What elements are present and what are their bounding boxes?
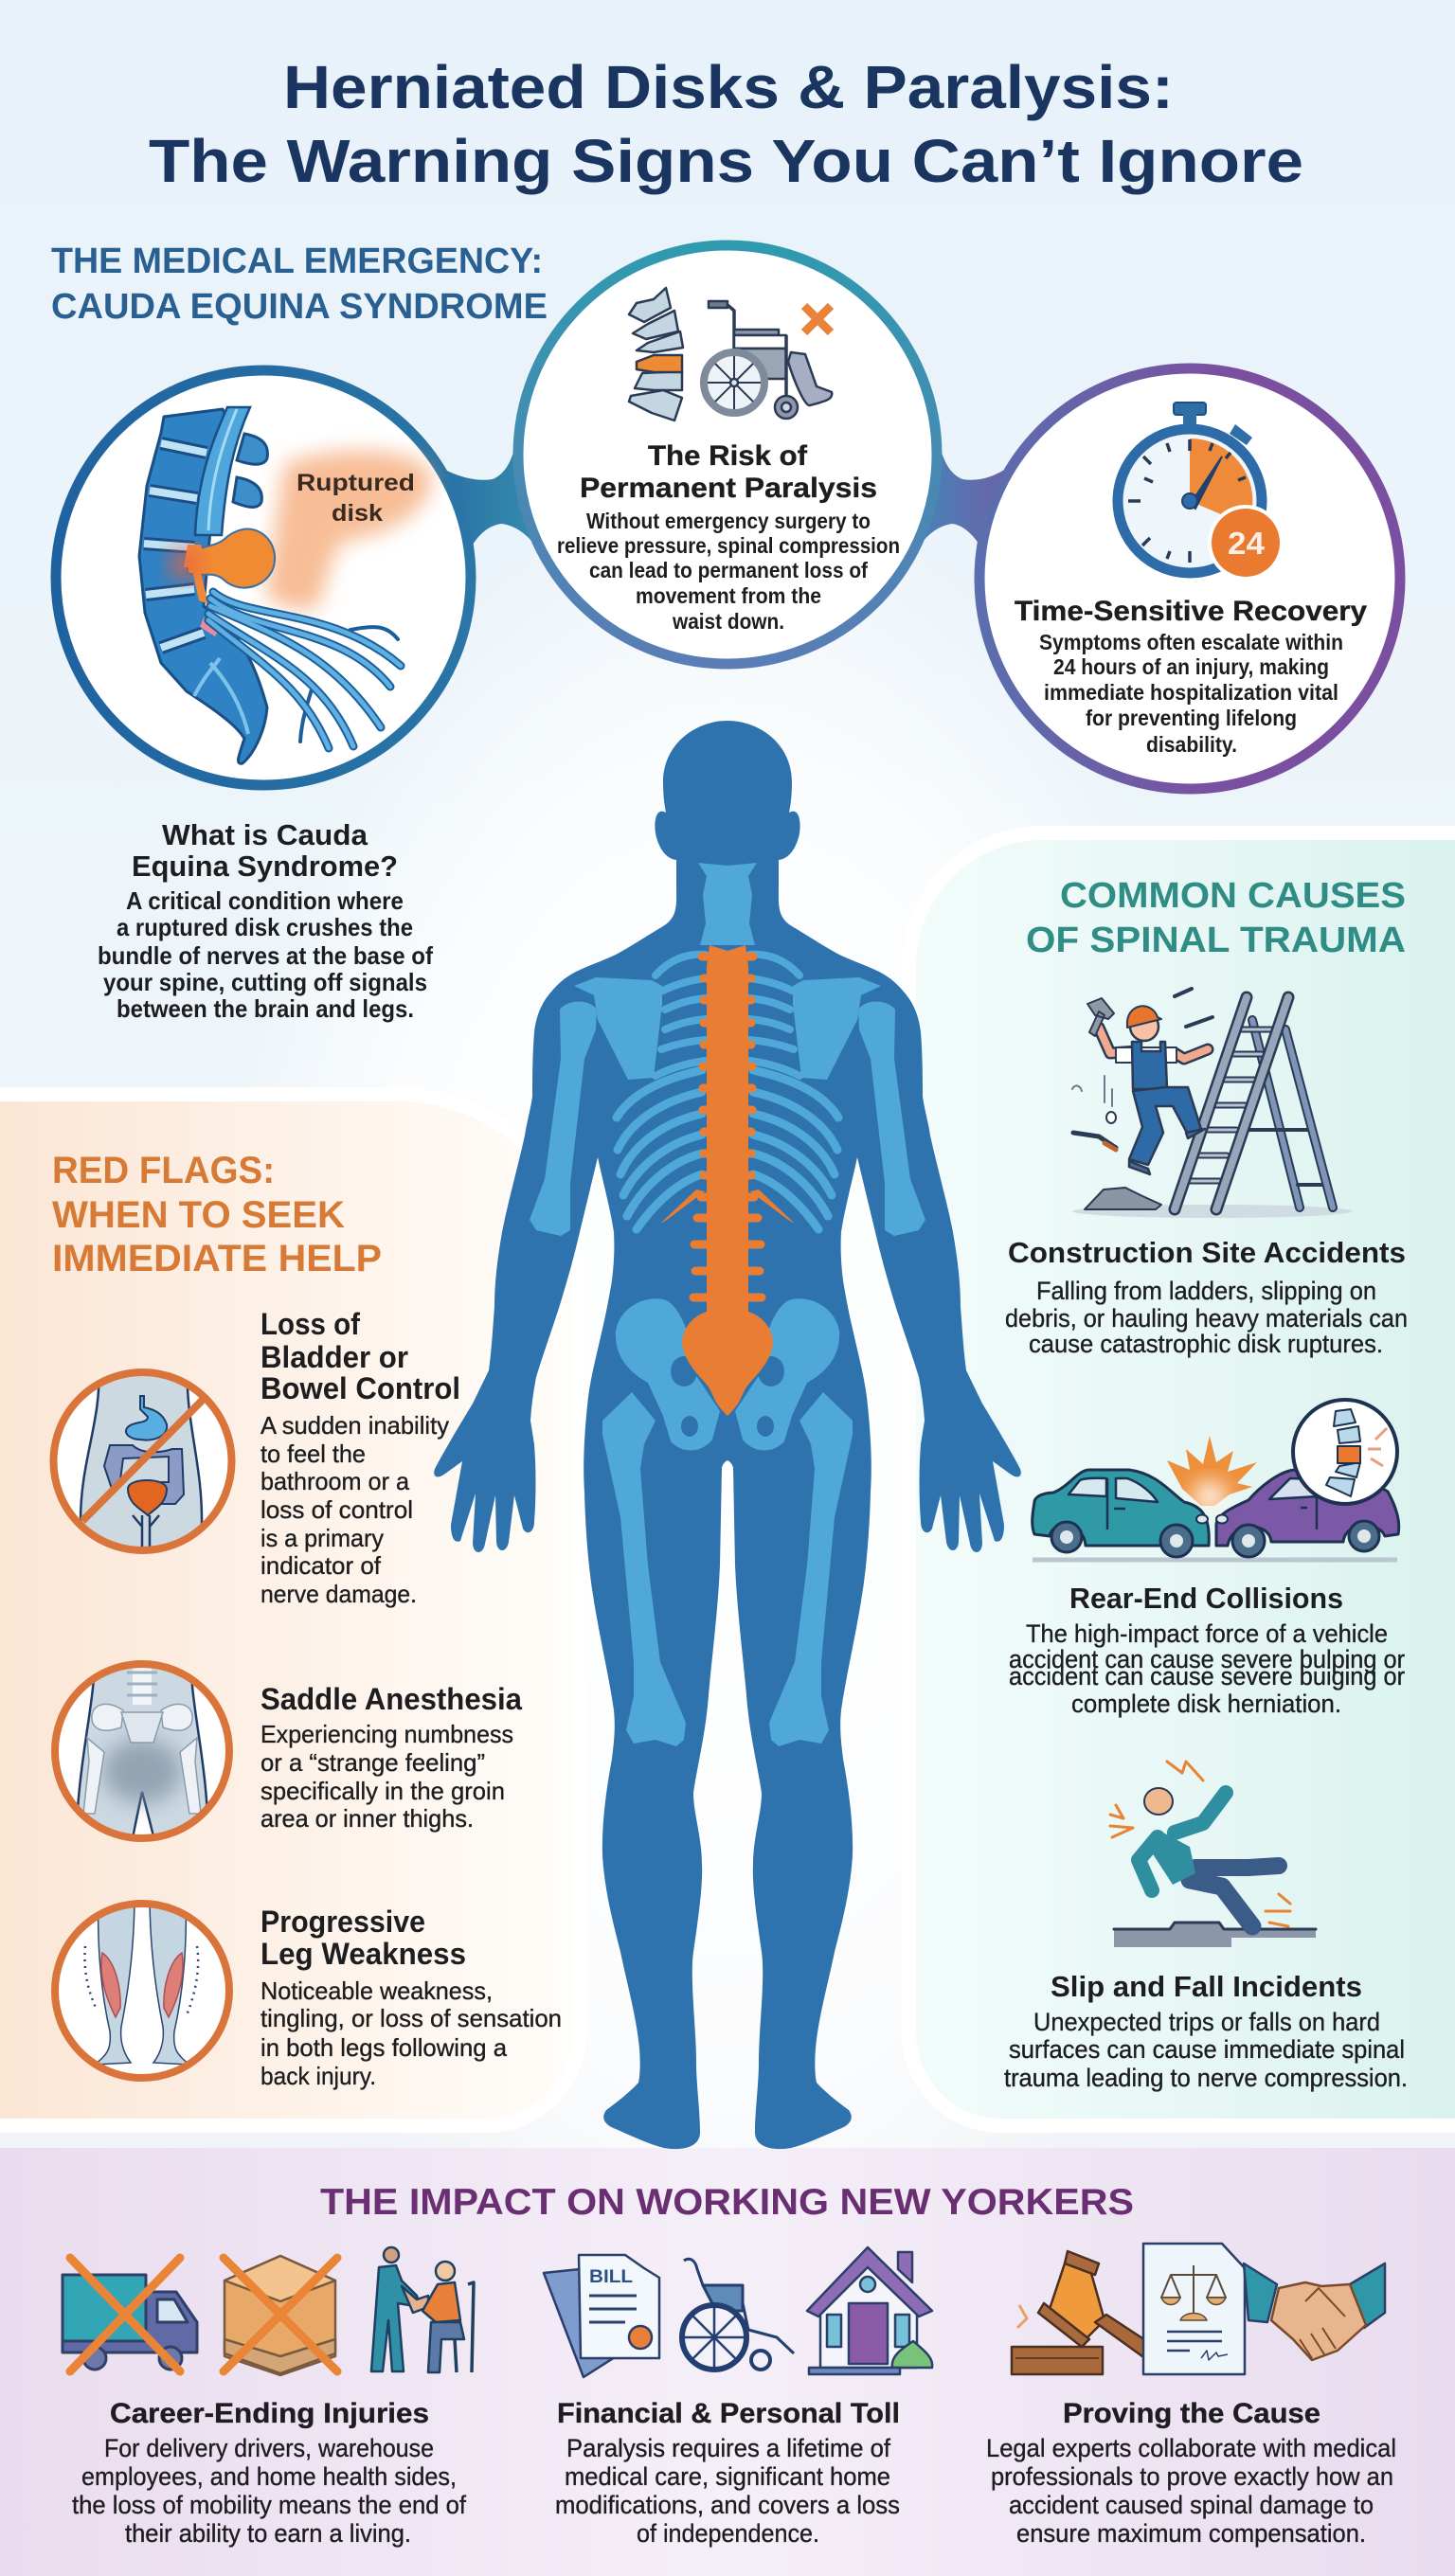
text: slip and fall incidents: Unexpected trips or falls on hard [1033, 2008, 1380, 2036]
text: slip and fall incidents [1004, 1970, 1408, 2092]
text: what is cauda equina syndrome [98, 818, 433, 1023]
text: progressive leg weakness: Leg Weakness [260, 1937, 466, 1971]
text: proving the cause: ensure maximum compensation. [1016, 2519, 1366, 2548]
text: risk description: waist down. [672, 609, 784, 634]
herniated disk [188, 529, 275, 588]
text: loss of bladder or bowel control: loss of control [260, 1495, 413, 1524]
text: proving the cause [986, 2398, 1396, 2548]
text: what is cauda equina syndrome: bundle of nerves at the base of [98, 941, 433, 970]
heading: risk: Permanent Paralysis [580, 473, 877, 504]
text: risk description: relieve pressure, spinal compression [557, 533, 900, 558]
heading: the impact on working new yorkers: THE IMPACT ON WORKING NEW YORKERS [320, 2182, 1134, 2223]
icon: orange x [804, 306, 831, 332]
title [149, 53, 1303, 195]
text: construction site accidents: Falling from ladders, slipping on [1036, 1277, 1376, 1305]
text: construction site accidents: Construction Site Accidents [1008, 1236, 1406, 1269]
panel: ruptured disk circle [56, 370, 471, 785]
text: proving the cause: professionals to prove exactly how an [991, 2462, 1393, 2491]
icon: handshake [1244, 2263, 1385, 2360]
text: what is cauda equina syndrome: between the brain and legs. [117, 994, 414, 1023]
text: financial and personal toll [555, 2398, 900, 2548]
text: loss of bladder or bowel control: nerve damage. [260, 1580, 417, 1608]
icon: house [807, 2247, 932, 2374]
text: recovery description: 24 hours of an injury, making [1053, 654, 1329, 679]
text: saddle anesthesia [260, 1682, 522, 1833]
heading: red flags [52, 1150, 382, 1279]
text: loss of bladder or bowel control: is a primary [260, 1524, 384, 1552]
icon: bladder and bowel prohibited [52, 1364, 232, 1563]
icon: rear-end collision [1033, 1400, 1399, 1560]
panel: red flags [0, 1101, 572, 2119]
heading: recovery: Time-Sensitive Recovery [1015, 596, 1367, 627]
text: risk description [557, 509, 900, 634]
icon: home health caregiver [371, 2247, 474, 2372]
text: recovery description: immediate hospitalization vital [1044, 680, 1338, 705]
text: financial and personal toll: medical care, significant home [565, 2462, 890, 2491]
text: career-ending injuries: Career-Ending Injuries [110, 2398, 429, 2429]
heading: common causes [1026, 876, 1406, 960]
icon: legal document [1143, 2244, 1245, 2374]
heading: common causes: OF SPINAL TRAUMA [1026, 921, 1406, 960]
heading: red flags: IMMEDIATE HELP [52, 1238, 382, 1279]
text: recovery description: for preventing lifelong [1086, 706, 1297, 730]
heading: the medical emergency: CAUDA EQUINA SYNDROME [51, 287, 548, 327]
text: loss of bladder or bowel control: Bladder or [260, 1340, 408, 1374]
heading: risk: The Risk of [648, 440, 808, 472]
title: The Warning Signs You Can’t Ignore [149, 127, 1303, 195]
text: loss of bladder or bowel control: A sudden inability [260, 1411, 449, 1440]
text: career-ending injuries [72, 2398, 466, 2548]
text: progressive leg weakness [260, 1905, 562, 2090]
text: slip and fall incidents: Slip and Fall Incidents [1051, 1970, 1362, 2003]
text: construction site accidents: cause catastrophic disk ruptures. [1029, 1330, 1383, 1358]
text: risk description: movement from the [636, 583, 821, 608]
text: what is cauda equina syndrome: Equina Syndrome? [132, 850, 398, 883]
badge number: 24 [1228, 526, 1266, 561]
icon: spine and wheelchair [629, 288, 832, 420]
text: financial and personal toll: modifications, and covers a loss [555, 2491, 900, 2519]
text: what is cauda equina syndrome: a ruptured disk crushes the [117, 913, 413, 941]
nerves [208, 592, 401, 748]
heading: the medical emergency [51, 242, 548, 327]
text: construction site accidents [1005, 1236, 1408, 1358]
text: risk description: can lead to permanent loss of [589, 558, 868, 582]
panel: time-sensitive recovery [979, 368, 1400, 789]
text: progressive leg weakness: tingling, or loss of sensation [260, 2004, 562, 2032]
spine highlight [660, 945, 795, 1416]
text: proving the cause: accident caused spinal damage to [1009, 2491, 1374, 2519]
text: loss of bladder or bowel control: Bowel Control [260, 1371, 460, 1405]
text: what is cauda equina syndrome: your spine, cutting off signals [103, 968, 427, 996]
text: financial and personal toll: Paralysis requires a lifetime of [566, 2434, 890, 2462]
text: progressive leg weakness: back injury. [260, 2062, 376, 2090]
panel: common causes [916, 840, 1455, 2119]
panel: the risk of permanent paralysis [518, 245, 937, 664]
worker [1099, 1028, 1208, 1059]
text: proving the cause: Proving the Cause [1063, 2398, 1320, 2429]
text: saddle anesthesia: Experiencing numbness [260, 1720, 513, 1748]
text: loss of bladder or bowel control [260, 1307, 460, 1608]
text: slip and fall incidents: trauma leading to nerve compression. [1004, 2064, 1408, 2092]
icon: box crossed out [224, 2256, 337, 2375]
heading: red flags: WHEN TO SEEK [52, 1194, 345, 1236]
icon: wheelchair [682, 2259, 794, 2370]
text: saddle anesthesia: Saddle Anesthesia [260, 1682, 522, 1716]
text: rear-end collisions: complete disk herniation. [1071, 1690, 1341, 1718]
icon: stopwatch [1118, 402, 1284, 581]
icon: truck crossed out [63, 2258, 197, 2371]
text: rear-end collisions: accident can cause severe buiging or [1009, 1662, 1405, 1690]
icon: legs weakness [54, 1894, 230, 2079]
label: ruptured disk [296, 470, 415, 527]
text: loss of bladder or bowel control: Loss of [260, 1307, 360, 1341]
text: career-ending injuries: employees, and home health sides, [81, 2462, 457, 2491]
text: loss of bladder or bowel control: indicator of [260, 1551, 382, 1580]
text: loss of bladder or bowel control: bathroom or a [260, 1467, 410, 1495]
text: recovery description [1039, 630, 1343, 757]
orange glow [265, 451, 432, 610]
text: rear-end collisions: Rear-End Collisions [1069, 1582, 1343, 1615]
text: rear-end collisions [1009, 1582, 1405, 1718]
heading: risk [580, 440, 877, 504]
text: career-ending injuries: the loss of mobility means the end of [72, 2491, 466, 2519]
human figure with skeleton and spine [434, 721, 1021, 2149]
text: what is cauda equina syndrome: What is Cauda [162, 818, 368, 851]
title: Herniated Disks & Paralysis: [283, 53, 1174, 121]
icon: bill: BILL [589, 2267, 633, 2287]
text: progressive leg weakness: Noticeable weakness, [260, 1977, 493, 2005]
text: career-ending injuries: their ability to earn a living. [125, 2519, 411, 2548]
icon: pelvis numbness [54, 1657, 230, 1847]
label: ruptured disk: disk [332, 500, 383, 527]
icon: bill [544, 2255, 659, 2377]
text: rear-end collisions: accident can cause severe bulping or [1009, 1645, 1405, 1673]
connector: left to middle [440, 436, 536, 549]
illustration: spine [139, 407, 401, 763]
text: risk description: Without emergency surgery to [586, 509, 871, 533]
heading: common causes: COMMON CAUSES [1060, 876, 1406, 916]
text: progressive leg weakness: in both legs following a [260, 2033, 508, 2062]
text: financial and personal toll: Financial & Personal Toll [557, 2398, 900, 2429]
text: saddle anesthesia: or a “strange feeling” [260, 1748, 485, 1777]
text: saddle anesthesia: specifically in the groin [260, 1777, 505, 1805]
panel: impact [0, 2148, 1455, 2576]
icon: construction worker falling from ladder [1072, 989, 1353, 1218]
text: what is cauda equina syndrome: A critical condition where [126, 886, 404, 915]
text: career-ending injuries: For delivery drivers, warehouse [104, 2434, 434, 2462]
text: rear-end collisions: The high-impact force of a vehicle [1026, 1619, 1388, 1648]
text: recovery description: Symptoms often escalate within [1039, 630, 1343, 654]
heading: red flags: RED FLAGS: [52, 1150, 275, 1191]
connector: middle to right [919, 436, 1009, 549]
icon: slip and fall [1110, 1762, 1316, 1947]
text: saddle anesthesia: area or inner thighs. [260, 1804, 474, 1833]
text: recovery description: disability. [1146, 732, 1237, 757]
text: loss of bladder or bowel control: to feel the [260, 1440, 366, 1468]
text: slip and fall incidents: surfaces can cause immediate spinal [1009, 2035, 1405, 2064]
text: proving the cause: Legal experts collaborate with medical [986, 2434, 1396, 2462]
text: construction site accidents: debris, or hauling heavy materials can [1005, 1304, 1408, 1333]
label: ruptured disk: Ruptured [296, 470, 415, 496]
text: progressive leg weakness: Progressive [260, 1905, 425, 1939]
text: financial and personal toll: of independence. [637, 2519, 819, 2548]
icon: gavel [1012, 2251, 1173, 2374]
heading: the medical emergency: THE MEDICAL EMERGENCY: [51, 242, 543, 281]
